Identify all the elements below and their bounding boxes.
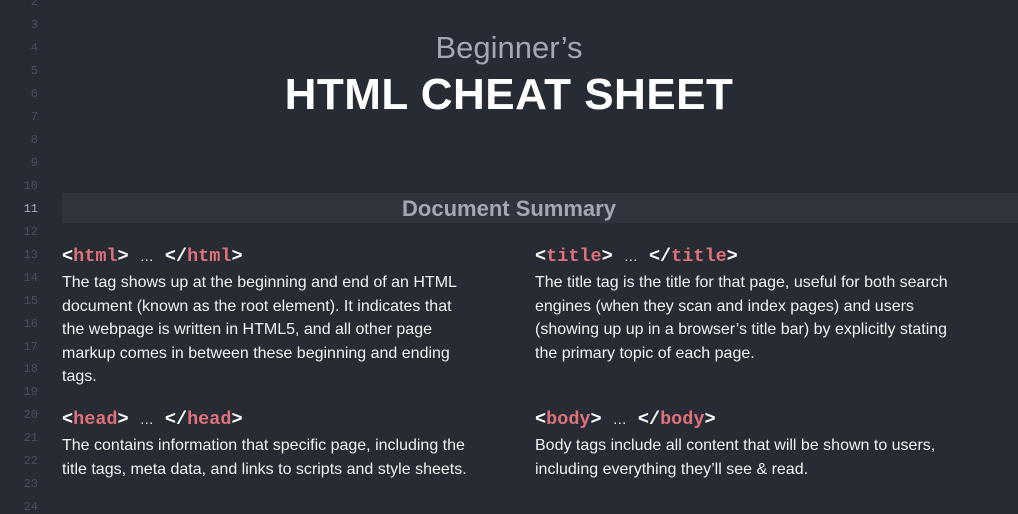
line numbers: 16 — [24, 317, 38, 331]
description: head: title tags, meta data, and links to scripts and style sheets. — [62, 460, 467, 478]
line numbers: 13 — [24, 248, 38, 262]
subtitle: Beginner’s — [435, 30, 583, 65]
line numbers: 20 — [24, 408, 38, 422]
title: HTML CHEAT SHEET — [285, 70, 733, 119]
description: html: tags. — [62, 368, 97, 385]
description: body: Body tags include all content that will be shown to users, — [535, 437, 935, 454]
line numbers: 23 — [24, 477, 38, 491]
section header text: Document Summary — [402, 196, 616, 221]
line numbers: 21 — [24, 431, 38, 445]
entry: html — [62, 246, 457, 385]
description: html: the webpage is written in HTML5, and all other page — [62, 321, 432, 338]
tag heading: body: <body> … </body> — [535, 409, 716, 430]
description: title: The title tag is the title for that page, useful for both search — [535, 274, 948, 291]
description: title — [535, 274, 948, 362]
tag heading: html: <html> … </html> — [62, 246, 243, 267]
line numbers: 9 — [31, 156, 38, 170]
section header: Document Summary — [62, 193, 1018, 223]
description: title: (showing up up in a browser’s title bar) by explicitly stating — [535, 321, 947, 338]
description: html — [62, 274, 457, 385]
line numbers: 3 — [31, 18, 38, 32]
line numbers: 22 — [24, 454, 38, 468]
line numbers: 4 — [31, 41, 38, 55]
line numbers: 10 — [24, 179, 38, 193]
entry: title — [535, 246, 948, 362]
description: html: document (known as the root element). It indicates that — [62, 298, 452, 314]
line numbers: 15 — [24, 294, 38, 308]
line numbers: 6 — [31, 87, 38, 101]
description: head — [62, 437, 467, 478]
line numbers: 5 — [31, 64, 38, 78]
line numbers: 11 — [24, 202, 38, 216]
line numbers: 7 — [31, 110, 38, 124]
tag heading: title: <title> … </title> — [535, 246, 738, 267]
description: head: The contains information that specific page, including the — [62, 437, 465, 454]
line numbers: 8 — [31, 133, 38, 147]
entry: head — [62, 409, 467, 478]
entry: body — [535, 409, 935, 478]
line numbers — [24, 0, 38, 514]
description: title: engines (when they scan and index pages) and users — [535, 298, 914, 314]
description: title: the primary topic of each page. — [535, 344, 755, 362]
description: body — [535, 437, 935, 478]
line numbers: 14 — [24, 271, 38, 285]
line numbers: 19 — [24, 385, 38, 399]
line numbers: 17 — [24, 340, 38, 354]
description: html: markup comes in between these beginning and ending — [62, 344, 450, 362]
tag heading: head: <head> … </head> — [62, 409, 243, 430]
description: body: including everything they’ll see & read. — [535, 460, 808, 478]
line numbers: 12 — [24, 225, 38, 239]
description: html: The tag shows up at the beginning and end of an HTML — [62, 274, 457, 291]
text: 24 — [24, 500, 38, 514]
line numbers: 18 — [24, 362, 38, 376]
